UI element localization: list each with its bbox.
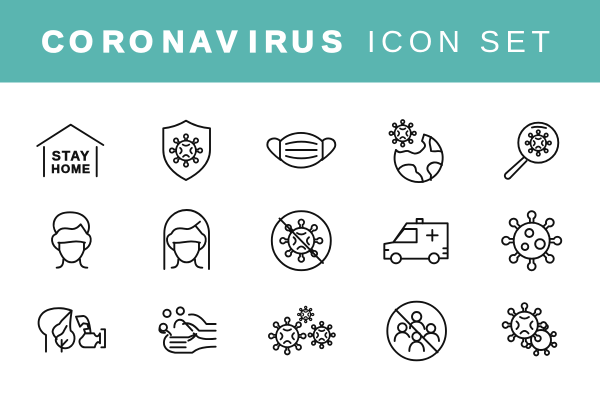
- icon: large virus: [502, 211, 561, 270]
- icon: face mask: [267, 133, 335, 168]
- icon: man with mask: [52, 212, 91, 268]
- icon: person coughing with spray: [39, 308, 105, 352]
- title: [42, 24, 550, 59]
- title: CORONAVIRUS: [42, 24, 342, 59]
- icon: ambulance: [384, 219, 448, 263]
- icon: globe with virus: [389, 120, 443, 182]
- title: ICON SET: [367, 25, 550, 59]
- icon: magnifier with virus: [505, 123, 558, 179]
- header banner: [0, 0, 600, 82]
- icon: no crowds sign: [387, 302, 446, 360]
- icon: stay home house: HOME: [51, 162, 90, 176]
- icon: hand washing: [159, 307, 216, 353]
- icon: two viruses: [503, 303, 562, 361]
- icon: stay home house: STAY: [52, 149, 89, 164]
- icon: stay home house: [37, 125, 103, 176]
- icon: virus shield: [163, 121, 210, 180]
- icon: group of viruses: [269, 306, 335, 354]
- icon: no virus sign: [272, 211, 331, 270]
- icon: woman with mask: [164, 210, 209, 269]
